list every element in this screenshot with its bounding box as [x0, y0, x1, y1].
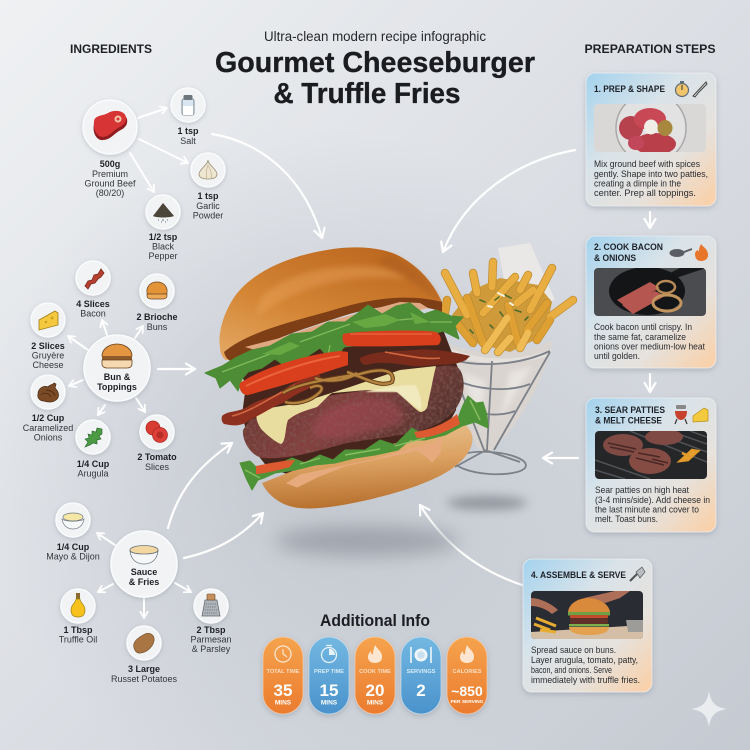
node: parmesan and parsley: 2 Tbsp — [196, 625, 226, 635]
node: truffle oil: 1 Tbsp — [63, 625, 93, 635]
pill: prep time — [309, 637, 349, 714]
node: caramelized onions: Caramelized — [23, 423, 73, 433]
burger and fries illustration — [205, 243, 573, 556]
card 2 heading: & ONIONS — [594, 253, 636, 263]
shadow: fries — [447, 496, 527, 510]
top bun — [220, 247, 442, 360]
pill: cook time: COOK TIME — [359, 669, 391, 675]
node: bacon — [76, 261, 110, 318]
node: garlic: Powder — [193, 210, 223, 220]
fry pile — [452, 278, 552, 352]
icon: spatula — [630, 567, 645, 581]
card 1 text: creating a dimple in the — [594, 178, 681, 188]
card 4 text: Spread sauce on buns. — [531, 645, 616, 655]
node: tomato slices: 2 Tomato — [137, 452, 177, 462]
heading: ingredients: INGREDIENTS — [70, 42, 152, 56]
node: salt: Salt — [180, 136, 196, 146]
pill: total time: MINS — [275, 700, 292, 706]
node: garlic — [191, 153, 225, 220]
card 1 text: Mix ground beef with spices — [594, 159, 700, 169]
node: sauce and fries hub — [111, 531, 177, 597]
bacon — [222, 372, 322, 425]
card 4 text: bacon, and onions. Serve — [531, 665, 612, 675]
pill: cook time: 20 — [366, 681, 384, 700]
pill: servings — [401, 637, 441, 714]
node: black pepper: Pepper — [148, 251, 178, 261]
node: salt — [171, 88, 205, 146]
node: caramelized onions — [23, 375, 73, 442]
subtitle: Ultra-clean modern recipe infographic — [264, 29, 486, 44]
card 2 photo: bacon in pan — [594, 267, 706, 316]
node: caramelized onions: 1/2 Cup — [32, 413, 65, 423]
section: bun and toppings — [23, 261, 178, 478]
card 2 text: Cook bacon until crispy. In — [594, 322, 692, 332]
cheese — [256, 366, 436, 444]
heading: preparation steps: PREPARATION STEPS — [584, 42, 716, 56]
node: brioche buns: 2 Brioche — [136, 312, 178, 322]
pill: calories: PER SERVING — [451, 699, 484, 705]
patty — [243, 366, 464, 458]
top arugula — [205, 303, 463, 391]
pill: total time — [263, 637, 303, 714]
section: sauce and fries — [46, 503, 232, 684]
node: arugula — [76, 420, 110, 478]
pill: total time: 35 — [274, 681, 292, 700]
card 2 heading: 2. COOK BACON — [594, 242, 663, 252]
card 1 text: center. Prep all toppings. — [594, 188, 696, 198]
node: sauce and fries hub: Sauce — [131, 567, 157, 577]
card 3 heading: & MELT CHEESE — [595, 416, 662, 426]
card 1 heading: 1. PREP & SHAPE — [594, 84, 665, 94]
node: ground beef — [83, 100, 137, 198]
node: russet potatoes: Russet Potatoes — [111, 674, 178, 684]
title block — [215, 29, 535, 110]
node: parmesan and parsley — [190, 589, 232, 654]
burger — [205, 247, 488, 508]
card 2 text: onions over medium-low heat — [594, 342, 705, 352]
node: bacon: 4 Slices — [76, 299, 110, 309]
node: bun and toppings hub: Toppings — [97, 382, 137, 392]
node: garlic: Garlic — [196, 201, 220, 211]
card 4 photo: assembling burger — [531, 591, 643, 639]
card 4 heading: 4. ASSEMBLE & SERVE — [531, 570, 626, 580]
wire stand — [449, 351, 550, 476]
card 3 text: the last minute and cover to — [595, 504, 699, 514]
node: black pepper: Black — [152, 242, 174, 252]
pill: calories — [447, 637, 487, 714]
node: arugula: 1/4 Cup — [77, 459, 110, 469]
node: bun and toppings hub: Bun & — [104, 372, 131, 382]
icon: cheese — [693, 408, 708, 422]
icon: knife — [693, 82, 707, 97]
node: mayo and dijon — [46, 503, 100, 562]
card 1 text: gently. Shape into two patties, — [594, 169, 708, 179]
card 1: prep and shape — [586, 73, 716, 206]
card 1 photo: beef in bowl — [594, 104, 706, 152]
icon: flame — [695, 244, 708, 261]
additional info heading: Additional Info — [320, 612, 430, 630]
card 3 text: melt. Toast buns. — [595, 514, 658, 524]
burger underlay — [232, 322, 458, 478]
main curved arrows — [158, 134, 650, 585]
pill: servings: 2 — [416, 681, 426, 700]
node: ground beef: Ground Beef — [84, 178, 136, 188]
pill: cook time: MINS — [367, 700, 384, 706]
node: ground beef: Premium — [92, 169, 128, 179]
main title: Gourmet Cheeseburger — [215, 47, 535, 79]
node: russet potatoes: 3 Large — [128, 664, 160, 674]
onions — [283, 370, 393, 403]
node: brioche buns — [136, 274, 178, 332]
pill: cook time — [355, 637, 395, 714]
node: garlic: 1 tsp — [197, 191, 219, 201]
node: caramelized onions: Onions — [34, 432, 63, 442]
node: arugula: Arugula — [77, 468, 109, 478]
icon: grill — [675, 405, 687, 424]
card 3 text: Sear patties on high heat — [595, 485, 689, 495]
node: tomato slices — [137, 415, 177, 472]
card 2 text: until golden. — [594, 351, 640, 361]
additional info — [263, 612, 487, 714]
node: parmesan and parsley: Parmesan — [190, 634, 232, 644]
node: gruyere cheese: 2 Slices — [31, 341, 65, 351]
main title: & Truffle Fries — [274, 78, 460, 110]
shadow: burger — [275, 526, 459, 556]
pill: prep time: MINS — [321, 700, 338, 706]
pill: calories: ~850 — [451, 683, 483, 699]
card 4: assemble and serve — [523, 559, 652, 692]
node: mayo and dijon: 1/4 Cup — [57, 542, 90, 552]
node: gruyere cheese: Cheese — [32, 360, 64, 370]
card 2 text: the same fat, caramelize — [594, 332, 686, 342]
tomato right — [342, 331, 441, 346]
fries in cone — [442, 243, 573, 476]
node: bun and toppings hub — [84, 335, 150, 401]
card 3 text: (3-4 mins/side). Add cheese in — [595, 495, 710, 505]
tomato large — [239, 351, 348, 395]
node: black pepper — [146, 195, 180, 261]
node: sauce and fries hub: & Fries — [129, 577, 159, 587]
decorative sparkle — [691, 691, 727, 727]
node: tomato slices: Slices — [145, 462, 169, 472]
pill: prep time: 15 — [320, 681, 338, 700]
card 3 heading: 3. SEAR PATTIES — [595, 405, 665, 415]
card 3: sear patties and melt cheese — [586, 398, 716, 532]
node: parmesan and parsley: & Parsley — [192, 644, 231, 654]
pill: servings: SERVINGS — [407, 669, 436, 675]
card 4 text: Layer arugula, tomato, patty, — [531, 655, 638, 665]
icon: pan — [670, 249, 692, 257]
node: black pepper: 1/2 tsp — [149, 232, 178, 242]
node: ground beef: 500g — [100, 159, 120, 169]
bottom tomato — [256, 414, 460, 474]
card 4 text: immediately with truffle fries. — [531, 675, 640, 685]
node: salt: 1 tsp — [177, 126, 199, 136]
node: bacon: Bacon — [80, 308, 106, 318]
node: brioche buns: Buns — [147, 322, 168, 332]
pill: prep time: PREP TIME — [314, 669, 344, 675]
card 3 photo: patties on grill — [595, 429, 707, 479]
node: gruyere cheese: Gruyère — [32, 350, 64, 360]
bottom lettuce — [240, 396, 488, 490]
pill: calories: CALORIES — [453, 669, 482, 675]
node: russet potatoes — [111, 626, 178, 684]
node: truffle oil: Truffle Oil — [59, 634, 97, 644]
bottom sauce — [287, 438, 442, 487]
node: ground beef: (80/20) — [96, 188, 124, 198]
pill: total time: TOTAL TIME — [267, 669, 300, 675]
node: mayo and dijon: Mayo & Dijon — [46, 552, 100, 562]
icon: stopwatch — [676, 81, 688, 96]
node: gruyere cheese — [31, 303, 65, 370]
bottom bun — [262, 425, 472, 508]
card 2: cook bacon and onions — [586, 236, 716, 368]
node: truffle oil — [59, 589, 97, 644]
section: beef and spices — [83, 88, 225, 261]
top sauce — [245, 302, 428, 352]
